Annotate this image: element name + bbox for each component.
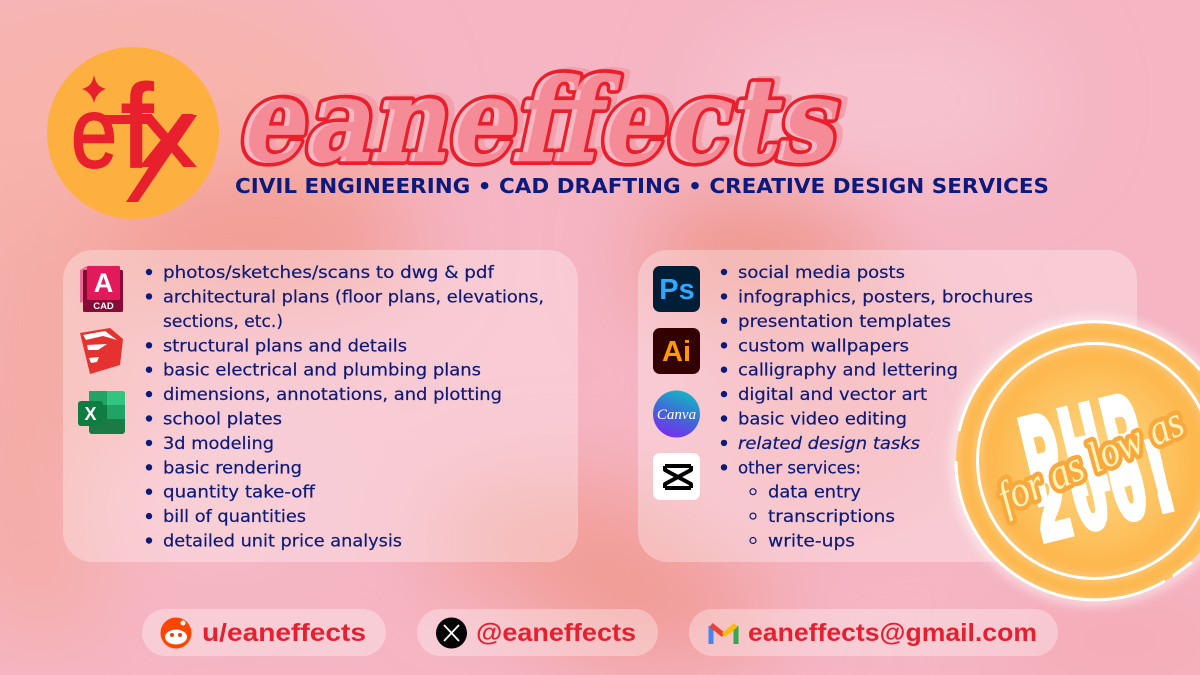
icon: CapCut [653, 453, 700, 500]
list: CAD services: basic rendering [163, 458, 302, 477]
icon: AutoCAD: CAD [93, 301, 114, 312]
icon: Excel: X [84, 404, 97, 424]
icon: gmail [711, 625, 736, 644]
contact pill: X [417, 609, 658, 656]
logo: efx badge: x [138, 77, 196, 189]
list: design services: social media posts [738, 263, 905, 282]
panel: CAD services [63, 250, 578, 562]
list: CAD services: architectural plans (floor plans, elevations, [163, 287, 544, 306]
list: CAD services: basic electrical and plumbing plans [163, 361, 481, 380]
title: eaneffects wordmark: eaneffects [237, 51, 861, 184]
contact pill: X: @eaneffects [476, 619, 636, 647]
list: CAD services: 3d modeling [163, 434, 274, 453]
list: design services: basic video editing [738, 410, 907, 428]
list: CAD services: sections, etc.) [163, 312, 283, 331]
icon: Illustrator [653, 328, 700, 374]
icon: reddit [160, 618, 192, 648]
icon: Excel [78, 391, 125, 434]
list: design services: transcriptions [768, 507, 895, 526]
icon: Illustrator: Ai [662, 336, 691, 368]
icon: SketchUp [80, 328, 123, 374]
price badge [949, 315, 1200, 607]
icon: Canva: Canva [657, 407, 696, 423]
list: CAD services: school plates [163, 410, 282, 428]
list: CAD services [146, 263, 544, 550]
icon: X [436, 618, 467, 648]
icon: AutoCAD [80, 266, 123, 312]
logo: efx badge: f [121, 61, 153, 193]
list: CAD services: quantity take-off [163, 483, 316, 502]
list: design services: calligraphy and lettering [738, 361, 958, 380]
contact pill: gmail: eaneffects@gmail.com [748, 619, 1037, 647]
icon: AutoCAD: A [94, 268, 113, 298]
panel: design services [638, 250, 1137, 562]
icon: Canva [653, 390, 700, 438]
list: design services: other services: [738, 458, 861, 477]
title: eaneffects wordmark: eaneffects [235, 54, 859, 187]
list: design services: presentation templates [738, 312, 951, 331]
logo: efx badge [47, 47, 219, 219]
list: design services: digital and vector art [738, 385, 928, 404]
logo: efx badge: e [71, 77, 117, 189]
list: CAD services: photos/sketches/scans to dwg & pdf [163, 263, 495, 282]
icon: Photoshop: Ps [659, 274, 695, 306]
contact pill: reddit [142, 609, 386, 656]
list: design services: related design tasks [738, 434, 920, 453]
title: eaneffects wordmark [240, 67, 848, 167]
list: design services [721, 263, 1033, 550]
list: design services: infographics, posters, brochures [738, 287, 1033, 306]
list: design services: data entry [768, 483, 861, 502]
list: CAD services: structural plans and details [163, 336, 407, 355]
list: CAD services: bill of quantities [163, 507, 306, 526]
subtitle: CIVIL ENGINEERING • CAD DRAFTING • CREATIVE DESIGN SERVICES [235, 174, 1049, 198]
title: eaneffects wordmark: eaneffects [230, 54, 854, 187]
list: CAD services: dimensions, annotations, and plotting [163, 385, 502, 404]
list: design services: custom wallpapers [738, 336, 909, 355]
list: design services: write-ups [768, 532, 855, 550]
list: CAD services: detailed unit price analysis [163, 532, 402, 550]
icon: Photoshop [653, 266, 700, 312]
contact pill: gmail [689, 609, 1058, 656]
contact pill: reddit: u/eaneffects [202, 619, 366, 647]
